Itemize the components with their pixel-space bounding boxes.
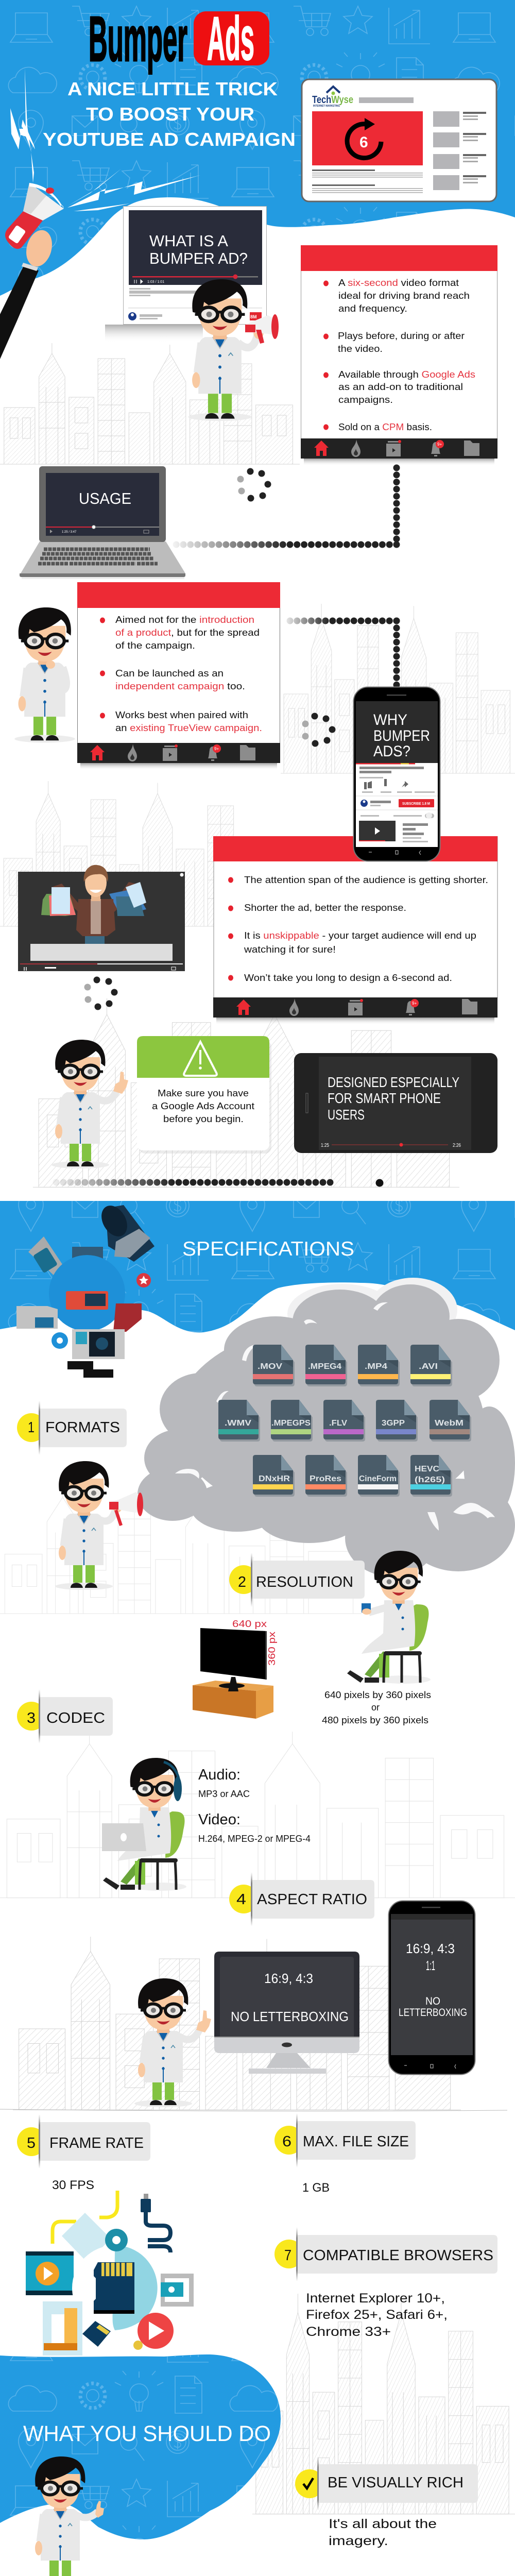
bullet list: of the campaign. — [115, 640, 195, 651]
codec text: MP3 or AAC — [198, 1789, 250, 1799]
landscape phone: designed especially: 2:26 — [453, 1143, 461, 1148]
bullet list: Shorter the ad, better the response. — [244, 903, 406, 913]
bullet list: ideal for driving brand reach — [338, 291, 470, 301]
heading — [328, 1074, 459, 1123]
subtitle: YOUTUBE AD CAMPAIGN — [43, 129, 296, 150]
hero blue wave background — [0, 0, 515, 296]
codec text — [198, 1767, 311, 1844]
label: aspect ratio — [229, 1872, 374, 1926]
bullet list: watching it for sure! — [244, 944, 336, 955]
video card: what is a bumper ad — [105, 206, 267, 343]
heading: ADS? — [373, 743, 410, 760]
resolution text: or — [371, 1702, 380, 1713]
tv on cabinet with dimensions: 360 px — [267, 1632, 277, 1666]
be visually rich text — [329, 2517, 437, 2548]
bullet list: the video. — [338, 344, 383, 354]
bullet list: independent campaign too. — [115, 681, 245, 691]
sketched city: codec section — [0, 1730, 515, 1898]
file icon CineForm: CineForm — [359, 1475, 397, 1483]
label: aspect ratio: 4 — [236, 1891, 246, 1908]
tv on cabinet with dimensions — [193, 1619, 277, 1719]
frame rate value: 30 FPS — [52, 2178, 94, 2192]
specifications heading: SPECIFICATIONS — [182, 1238, 354, 1260]
label: resolution: RESOLUTION — [256, 1574, 353, 1590]
sketched city behind doctor with cloud — [0, 1486, 362, 1614]
browsers text: Internet Explorer 10+, — [306, 2291, 445, 2306]
heading: WHAT IS A — [149, 232, 228, 250]
loading spinner — [237, 468, 271, 502]
bullet list: as an add-on to traditional — [338, 382, 463, 392]
nav bar — [77, 743, 280, 770]
heading: USERS — [328, 1107, 365, 1123]
heading: FOR SMART PHONE — [328, 1090, 441, 1106]
file icon 3GPP — [376, 1400, 418, 1442]
TechWyse logo — [312, 87, 353, 108]
smartphone: aspect ratio: NO — [425, 1995, 440, 2007]
TechWyse logo: TechWyse — [312, 94, 353, 106]
bullet list: A six-second video format — [338, 278, 459, 288]
bullet list: Sold on a CPM basis. — [338, 422, 432, 432]
label: max file size — [274, 2113, 416, 2167]
file icon WMV — [218, 1400, 260, 1442]
smartphone: aspect ratio: 16:9, 4:3 — [406, 1941, 455, 1956]
dotted connector — [52, 1179, 330, 1186]
browser mockup card — [302, 79, 496, 201]
sitting doctor with headphones and laptop — [102, 1758, 186, 1891]
video card with shopper — [18, 865, 185, 971]
label: formats: FORMATS — [45, 1419, 120, 1436]
cloud highlights — [175, 1302, 495, 1531]
label: be visually rich: BE VISUALLY RICH — [328, 2475, 464, 2491]
bullet list: The attention span of the audience is getting shorter. — [244, 875, 488, 885]
bullet list: an existing TrueView campaign. — [115, 723, 262, 733]
tip card: google ads account — [137, 1036, 271, 1154]
doctor pointing to tip — [52, 1040, 128, 1168]
laptop: usage: 1:25 / 3:47 — [62, 531, 77, 534]
file icon MOV: .MOV — [258, 1362, 282, 1371]
file icon DNxHR — [253, 1455, 295, 1497]
media icons cluster — [26, 2191, 194, 2355]
file icon 3GPP: 3GPP — [382, 1419, 405, 1428]
tip text: a Google Ads Account — [152, 1101, 254, 1111]
heading: what you should do: WHAT YOU SHOULD DO — [23, 2421, 271, 2446]
file icon MPEGPS: .MPEGPS — [271, 1419, 311, 1428]
what you should do blue blob — [0, 2354, 281, 2539]
desktop monitor: aspect ratio — [214, 1952, 359, 2074]
bullet list: Can be launched as an — [115, 668, 224, 679]
bullet list: Won’t take you long to design a 6-second ad. — [244, 973, 452, 983]
bullet list: Aimed not for the introduction — [115, 615, 254, 625]
file icon WMV: .WMV — [225, 1419, 251, 1428]
doctor with megaphone — [188, 279, 279, 421]
TechWyse logo: INTERNET MARKETING — [313, 105, 340, 108]
bullet list: and frequency. — [338, 303, 407, 314]
sketched city behind shopper video — [0, 781, 278, 926]
nav bar — [213, 997, 497, 1025]
label: be visually rich — [295, 2456, 478, 2511]
keyboard — [38, 549, 158, 564]
heading — [149, 232, 248, 267]
dotted connector to phone — [286, 621, 397, 686]
nav bar — [301, 438, 497, 466]
red play button badge — [194, 11, 269, 65]
label: frame rate: 5 — [27, 2135, 36, 2151]
usage card — [77, 582, 280, 770]
subtitle: TO BOOST YOUR — [86, 104, 254, 125]
file icon HEVC — [410, 1455, 452, 1497]
file icon AVI — [410, 1345, 452, 1386]
tip text: Make sure you have — [158, 1088, 249, 1098]
bullet list: Plays before, during or after — [338, 331, 465, 341]
file icon FLV — [323, 1400, 365, 1442]
loading spinner — [302, 713, 336, 747]
sketched city behind usage card — [281, 604, 515, 773]
bullet list: Works best when paired with — [115, 710, 248, 720]
warning icon — [184, 1042, 217, 1076]
heading: BUMPER — [373, 727, 430, 744]
file icon ProRes — [305, 1455, 347, 1497]
browsers text: Firefox 25+, Safari 6+, — [306, 2308, 448, 2322]
file icon WebM: WebM — [435, 1419, 464, 1428]
smartphone: aspect ratio: 1:1 — [426, 1958, 435, 1973]
red video player with replay six icon — [312, 111, 423, 165]
landscape phone: designed especially: 1:25 — [321, 1143, 329, 1148]
label: resolution: 2 — [238, 1574, 246, 1590]
bullet list: Available through Google Ads — [338, 369, 475, 380]
be visually rich text: It's all about the — [329, 2517, 437, 2531]
file icon AVI: .AVI — [419, 1362, 438, 1371]
file icon CineForm — [358, 1455, 400, 1497]
subtitle — [43, 78, 296, 150]
codec text: H.264, MPEG-2 or MPEG-4 — [198, 1834, 311, 1844]
desktop monitor: aspect ratio: 16:9, 4:3 — [264, 1971, 313, 1986]
smartphone: aspect ratio — [388, 1901, 475, 2074]
file icon FLV: .FLV — [329, 1419, 347, 1428]
resolution text — [322, 1690, 431, 1725]
tv on cabinet with dimensions: 640 px — [232, 1619, 267, 1629]
heading: WHY — [373, 711, 407, 728]
file icon HEVC: (h265) — [415, 1476, 445, 1484]
label: compatible browsers: 7 — [284, 2247, 291, 2264]
file icon HEVC: HEVC — [415, 1465, 439, 1473]
doctor pointing up — [31, 2456, 104, 2576]
doctor shouting with megaphone — [55, 1461, 143, 1590]
file icon DNxHR: DNxHR — [259, 1475, 290, 1483]
bullet list — [323, 278, 475, 432]
tip text — [152, 1088, 254, 1124]
why bumper ads card — [213, 836, 497, 1025]
bullet list — [100, 615, 262, 733]
bullet list — [228, 875, 488, 983]
label: formats: 1 — [28, 1419, 35, 1436]
sitting doctor with coffee — [347, 1551, 431, 1684]
file icon MP4: .MP4 — [365, 1362, 387, 1371]
landscape phone: designed especially — [294, 1053, 497, 1153]
smartphone: why bumper ads — [353, 687, 440, 861]
red header bar — [301, 245, 497, 271]
file size value: 1 GB — [302, 2181, 330, 2195]
smartphone: why bumper ads: SUBSCRIBE 1.8 M — [402, 801, 430, 806]
red video player with replay six icon: 6 — [359, 134, 368, 151]
laptop: usage — [20, 466, 185, 579]
label: codec: 3 — [27, 1710, 36, 1726]
player progress bar: 1:03 / 1:01 — [147, 280, 164, 284]
usage label: USAGE — [79, 489, 131, 507]
heading: BUMPER AD? — [149, 249, 248, 267]
codec text: Audio: — [198, 1767, 241, 1783]
loading spinner — [84, 977, 117, 1010]
label: max file size: MAX. FILE SIZE — [303, 2133, 409, 2150]
resolution text: 480 pixels by 360 pixels — [322, 1715, 428, 1725]
codec text: Video: — [198, 1811, 241, 1828]
bullet list: campaigns. — [338, 395, 393, 405]
label: codec: CODEC — [46, 1710, 105, 1726]
lightning bolts from megaphone — [10, 68, 200, 211]
thinking doctor — [14, 607, 75, 743]
label: frame rate — [17, 2114, 150, 2168]
label: formats — [17, 1401, 127, 1455]
specifications blue section — [0, 1201, 515, 1332]
sketched city behind aspect ratio — [13, 1937, 461, 2110]
sketched city behind first doctor — [0, 343, 300, 464]
label: frame rate: FRAME RATE — [49, 2135, 144, 2151]
subtitle: A NICE LITTLE TRICK — [67, 78, 278, 99]
browsers text — [306, 2291, 448, 2339]
doctor presenting screens — [134, 1978, 211, 2107]
title: Bumper Ads: Bumper — [89, 4, 187, 75]
browsers text: Chrome 33+ — [306, 2325, 391, 2339]
file icon MPEGPS — [271, 1400, 313, 1442]
red header bar — [213, 836, 497, 861]
shopping man — [41, 865, 146, 944]
file icon MP4 — [358, 1345, 400, 1386]
bullet list: It is unskippable - your target audience will end up — [244, 930, 476, 941]
label: resolution — [229, 1553, 365, 1607]
tip text: before you begin. — [163, 1114, 244, 1124]
heading: DESIGNED ESPECIALLY — [328, 1074, 459, 1090]
file icon MOV — [253, 1345, 295, 1386]
player progress bar — [132, 274, 258, 284]
what is card panel — [301, 245, 497, 466]
sketched city behind tip cards — [33, 998, 459, 1187]
megaphone with raised hand — [0, 183, 64, 359]
label: compatible browsers: COMPATIBLE BROWSERS — [303, 2247, 493, 2264]
label: compatible browsers — [274, 2227, 497, 2281]
be visually rich text: imagery. — [329, 2534, 388, 2548]
camera gear cluster — [16, 1201, 154, 1378]
dotted connector to laptop — [173, 468, 397, 545]
label: max file size: 6 — [282, 2133, 291, 2150]
smartphone: aspect ratio: LETTERBOXING — [399, 2007, 467, 2019]
label: codec — [17, 1689, 113, 1743]
file icon MPEG4: .MPEG4 — [308, 1362, 341, 1371]
file icon WebM — [430, 1400, 471, 1442]
bullet list: of a product , but for the spread — [115, 628, 260, 638]
file icon ProRes: ProRes — [310, 1475, 341, 1483]
resolution text: 640 pixels by 360 pixels — [324, 1690, 431, 1700]
red header bar — [77, 582, 280, 608]
video card: what is a bumper ad: 8M — [250, 314, 257, 319]
label: aspect ratio: ASPECT RATIO — [257, 1891, 367, 1908]
sketched city behind browsers — [252, 2294, 515, 2514]
file icon MPEG4 — [305, 1345, 347, 1386]
title: Bumper Ads: Ads — [207, 4, 254, 73]
speech cloud of formats — [138, 1278, 515, 1577]
heading — [373, 711, 430, 760]
desktop monitor: aspect ratio: NO LETTERBOXING — [231, 2009, 349, 2024]
